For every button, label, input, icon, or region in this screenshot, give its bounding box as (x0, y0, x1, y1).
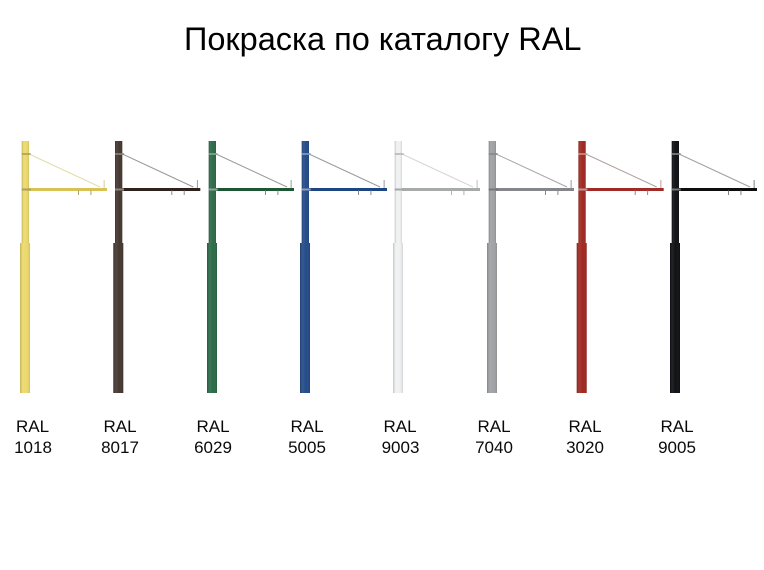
label: RAL 3020 (566, 417, 604, 457)
label: RAL 9005 (658, 417, 696, 457)
label: RAL 6029: 6029 (194, 438, 232, 457)
label: RAL 3020: 3020 (566, 438, 604, 457)
label: RAL 8017: RAL (103, 417, 137, 436)
label: RAL 8017 (101, 417, 139, 457)
label: RAL 1018 (14, 417, 52, 457)
pole: RAL 5005 blue (300, 141, 387, 393)
pole: RAL 3020 red (577, 141, 664, 393)
label: RAL 8017: 8017 (101, 438, 139, 457)
label: RAL 9005: 9005 (658, 438, 696, 457)
label: RAL 6029: RAL (196, 417, 230, 436)
pole: RAL 6029 green (207, 141, 294, 393)
label: RAL 6029 (194, 417, 232, 457)
label: RAL 9005: RAL (660, 417, 694, 436)
label: RAL 1018: 1018 (14, 438, 52, 457)
label: RAL 9003 (382, 417, 419, 457)
pole: RAL 7040 grey (487, 141, 574, 393)
label: RAL 7040: 7040 (475, 438, 513, 457)
title: Покраска по каталогу RAL (184, 21, 581, 57)
label: RAL 5005: RAL (290, 417, 324, 436)
label: RAL 5005 (288, 417, 326, 457)
label: RAL 9003: RAL (383, 417, 417, 436)
label: RAL 9003: 9003 (382, 438, 419, 457)
label: RAL 1018: RAL (16, 417, 49, 436)
pole: RAL 8017 brown (113, 141, 200, 393)
pole: RAL 1018 yellow (20, 141, 107, 393)
label: RAL 5005: 5005 (288, 438, 326, 457)
pole: RAL 9005 black (670, 141, 757, 393)
label: RAL 7040 (475, 417, 513, 457)
label: RAL 3020: RAL (568, 417, 602, 436)
pole: RAL 9003 white (393, 141, 480, 393)
label: RAL 7040: RAL (477, 417, 511, 436)
